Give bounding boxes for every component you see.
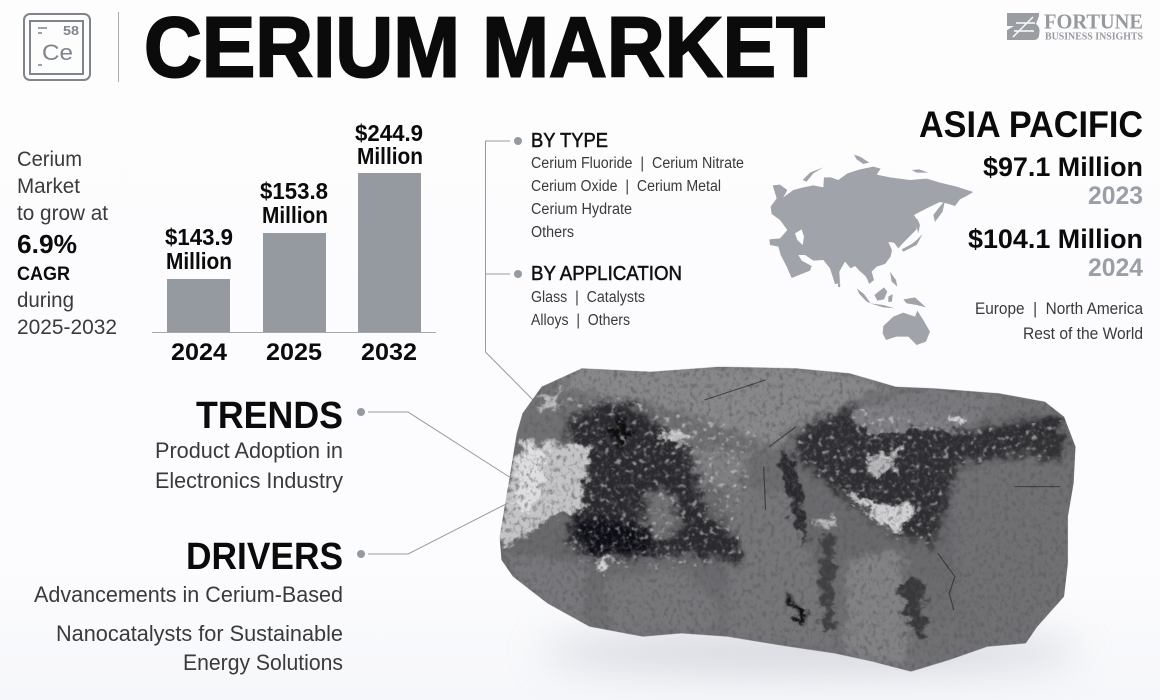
logo: Fortune Business Insights: BUSINESS INSIGHTS [1045,32,1143,42]
photo: cerium metal chunk [500,366,1076,672]
icon: cerium periodic table cell: Ce [42,40,73,65]
CAGR text block: Market [17,175,80,198]
segmentation text: by application: Alloys | Others [531,312,630,329]
segmentation text: by type [531,130,744,241]
drivers text: Advancements in Cerium-Based [34,582,343,607]
bar chart: $244.9 [355,120,423,146]
region heading and values: $104.1 Million [968,224,1143,254]
trends text [155,395,343,493]
fracture lines [704,380,1060,610]
segmentation text: by application: Glass | Catalysts [531,289,645,306]
metallic highlights [842,490,915,533]
icon: cerium periodic table cell [24,14,90,80]
trends text: Product Adoption in [155,438,343,463]
surface grain [500,367,1074,668]
rock surface masses [500,367,1076,667]
region heading and values: Rest of the World [1023,324,1143,343]
logo: Fortune Business Insights [1007,10,1143,42]
map: Asia Pacific [769,155,973,345]
segmentation text: by application: BY APPLICATION [531,263,682,285]
region heading and values [919,104,1143,343]
segmentation text: by type: Cerium Oxide | Cerium Metal [531,178,721,195]
icon: cerium periodic table cell: 58 [63,24,79,38]
region heading and values: 2023 [1088,182,1143,210]
region heading and values: Europe | North America [975,299,1143,318]
bar chart: Million [357,143,423,169]
CAGR text block [17,148,117,339]
title: CERIUM MARKET [144,0,825,96]
CAGR text block: Cerium [17,148,82,171]
bar chart [152,120,436,366]
drivers text: DRIVERS [186,536,343,578]
header divider [118,12,119,82]
connector: drivers [357,503,508,558]
CAGR text block: during [17,289,74,312]
region heading and values: ASIA PACIFIC [919,104,1143,145]
connector: trends [357,408,511,478]
region heading and values: 2024 [1088,254,1143,282]
bar chart: Million [262,202,328,228]
region heading and values: $97.1 Million [983,152,1143,182]
CAGR text block: CAGR [17,263,70,285]
dark cavities [563,400,743,563]
bar chart: 2024 [171,339,227,366]
trends text: TRENDS [196,395,343,437]
bar chart: 2025 [266,339,322,366]
drivers text: Energy Solutions [183,650,343,675]
bar chart: 2032 [361,339,417,366]
segmentation text: by application [531,263,682,329]
segmentation text: by type: Others [531,224,574,241]
bright patch [500,440,591,547]
bar chart: $143.9 [165,224,233,250]
connector: segmentation [486,137,537,404]
CAGR text block: 2025-2032 [17,316,117,339]
bar chart: $153.8 [260,178,328,204]
CAGR text block: to grow at [17,202,108,225]
segmentation text: by type: Cerium Fluoride | Cerium Nitrate [531,155,744,172]
drivers text [34,536,343,675]
segmentation text: by type: BY TYPE [531,130,608,152]
logo: Fortune Business Insights: FORTUNE [1044,10,1143,34]
bar chart: Million [166,248,232,274]
segmentation text: by type: Cerium Hydrate [531,201,632,218]
rock shadow [540,630,1080,674]
drivers text: Nanocatalysts for Sustainable [56,621,343,646]
trends text: Electronics Industry [155,468,343,493]
CAGR text block: 6.9% [17,229,77,259]
